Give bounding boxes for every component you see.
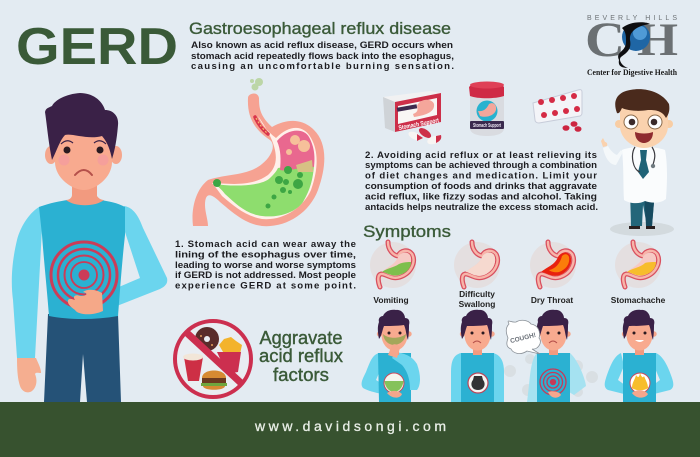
medicine: Stomach Support bottle: Stomach Support — [473, 123, 501, 129]
label: Dry Throat: Dry Throat — [531, 295, 573, 305]
heading: aggravate acid reflux factors: factors — [273, 364, 329, 385]
face — [55, 130, 112, 190]
logo: Beverly Hills Center for Digestive Health — [585, 11, 678, 77]
text block 1: stomach acid damage: if GERD is not addressed. Most people — [175, 270, 356, 281]
ears — [45, 146, 57, 164]
hair — [45, 93, 118, 160]
medicine: Stomach Support box: Stomach Support — [398, 117, 440, 132]
footer band — [0, 402, 700, 457]
intro text block: causing an uncomfortable burning sensation. — [191, 61, 454, 72]
foam blobs — [286, 135, 313, 172]
text block 2: avoiding acid reflux: of diet changes and medication. Limit your — [365, 170, 597, 182]
text block 2: avoiding acid reflux — [365, 150, 598, 213]
left hand — [17, 358, 41, 392]
prohibition bar — [187, 333, 241, 383]
medicine: Stomach Support bottle — [469, 82, 504, 136]
symptom: stomachache stomach — [615, 242, 661, 288]
heading: aggravate acid reflux factors — [259, 327, 344, 385]
intro text block — [191, 40, 454, 72]
neck — [66, 183, 104, 205]
medicine: Stomach Support box — [383, 91, 441, 132]
heading: Gastroesophageal reflux disease: Gastroesophageal reflux disease — [189, 20, 451, 38]
symptom: dry throat stomach — [530, 242, 576, 288]
doctor ears — [615, 120, 623, 128]
text block 1: stomach acid damage: lining of the esophagus over time, — [175, 250, 356, 260]
heading: aggravate acid reflux factors: acid reflux — [259, 345, 344, 366]
cheeks, eyes and mouth — [58, 141, 108, 175]
doctor hair — [615, 89, 669, 118]
illustration: man with stomach pain — [12, 93, 167, 402]
doctor raised arm — [603, 146, 623, 165]
medicine: blister pack — [533, 90, 582, 132]
icon: no fast food sign — [175, 321, 251, 397]
logo: Beverly Hills Center for Digestive Health: H — [637, 14, 678, 66]
doctor tie — [638, 150, 649, 179]
smoke clouds — [504, 354, 598, 397]
heading: Symptoms: Symptoms — [363, 222, 451, 241]
doctor coat — [622, 147, 667, 203]
doctor shadow — [610, 222, 674, 236]
intro text block: Also known as acid reflux disease, GERD occurs when — [191, 40, 453, 51]
soda cup — [183, 354, 203, 381]
stethoscope — [633, 147, 655, 172]
text block 2: avoiding acid reflux: symptoms can be achieved through a combination — [365, 160, 597, 171]
figure: man with burning stomach — [605, 310, 673, 402]
doctor smile — [635, 132, 653, 143]
text block 1: stomach acid damage — [175, 239, 356, 292]
esophagus irritation — [255, 117, 268, 134]
vapor bubbles — [250, 78, 263, 90]
figure: man with kettlebell — [451, 310, 504, 402]
doctor shoes — [629, 226, 655, 229]
left sleeve — [12, 206, 42, 358]
medicine: capsules — [407, 126, 442, 146]
text block 1: stomach acid damage: leading to worse and worse symptoms — [175, 260, 356, 271]
doctor glasses and eyes — [624, 115, 662, 129]
torso — [39, 200, 125, 319]
hand on stomach — [68, 290, 103, 314]
illustration: stomach — [193, 78, 324, 226]
green bubbles — [213, 166, 303, 208]
right sleeve — [100, 206, 167, 311]
text block 1: stomach acid damage: experience GERD at some point. — [175, 280, 356, 292]
pink upper stomach — [277, 131, 314, 170]
logo: Beverly Hills Center for Digestive Health: C — [585, 11, 625, 67]
stomach pain rings — [51, 242, 117, 308]
symptom: difficulty swallowing stomach — [454, 242, 500, 288]
title: GERD: GERD — [16, 18, 178, 76]
green stomach acid — [214, 165, 314, 216]
text block 2: avoiding acid reflux: 2. Avoiding acid reflux or at least relieving its — [365, 150, 597, 161]
text block 2: avoiding acid reflux: antacids helps neutralize the excess stomach acid. — [365, 202, 598, 213]
logo: Beverly Hills Center for Digestive Health: Center for Digestive Health — [587, 68, 677, 77]
text block 1: stomach acid damage: 1. Stomach acid can wear away the — [175, 239, 356, 250]
speech cloud: cough: COUGH! — [509, 332, 537, 345]
label: Difficulty Swallong: Swallong — [459, 299, 495, 309]
label: Stomachache: Stomachache — [611, 295, 666, 305]
stomach inner lining — [212, 116, 317, 219]
heading: aggravate acid reflux factors: Aggravate — [260, 327, 342, 348]
label: Difficulty Swallong — [459, 289, 495, 309]
symptom: vomiting stomach — [370, 242, 416, 288]
intro text block: stomach acid repeatedly flows back into the esophagus, — [191, 51, 454, 62]
label: Difficulty Swallong: Difficulty — [459, 289, 495, 299]
doctor legs — [630, 190, 655, 226]
illustration: doctor — [601, 89, 674, 236]
text block 2: avoiding acid reflux: consumption of foods and drinks that aggravate — [365, 181, 597, 192]
donut — [195, 327, 219, 351]
text block 2: avoiding acid reflux: acid reflux, like fizzy sodas and alcohol. Taking — [365, 192, 597, 202]
stomach wall — [193, 93, 324, 226]
figure: man vomiting — [362, 310, 420, 402]
burger — [201, 370, 227, 390]
label: Vomiting: Vomiting — [373, 295, 409, 305]
fries — [217, 337, 242, 374]
pants — [44, 314, 121, 402]
doctor face — [620, 108, 668, 148]
footer url: www.davidsongi.com — [254, 418, 446, 434]
logo: Beverly Hills Center for Digestive Health: BEVERLY HILLS — [587, 15, 677, 22]
figure: man coughing — [504, 310, 598, 402]
